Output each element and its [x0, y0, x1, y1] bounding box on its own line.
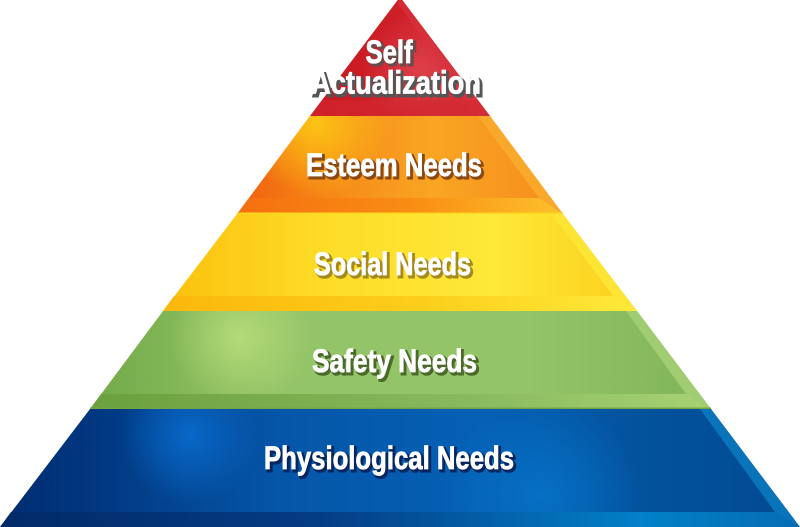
label: Self Actualization: Actualization: [313, 67, 483, 103]
tier: Esteem Needs: [237, 116, 563, 214]
label: Safety Needs: Safety Needs: [312, 343, 477, 379]
label: Social Needs: Social Needs: [316, 248, 473, 284]
label: Esteem Needs: Esteem Needs: [308, 149, 484, 185]
label: Self Actualization: Actualization: [311, 64, 481, 100]
tier: Safety Needs: [90, 311, 711, 409]
label: Safety Needs: Safety Needs: [314, 345, 479, 381]
tier: Social Needs: [163, 214, 637, 311]
label: Physiological Needs: Physiological Needs: [266, 442, 516, 478]
tier: Physiological Needs: [0, 409, 800, 527]
label: Physiological Needs: Physiological Needs: [264, 440, 514, 476]
label: Self Actualization: Self: [368, 36, 415, 72]
tier: Self Actualization: [310, 0, 490, 116]
label: Esteem Needs: Esteem Needs: [306, 147, 482, 183]
label: Social Needs: Social Needs: [314, 246, 471, 282]
label: Self Actualization: [311, 34, 483, 103]
label: Self Actualization: Self: [366, 34, 413, 70]
